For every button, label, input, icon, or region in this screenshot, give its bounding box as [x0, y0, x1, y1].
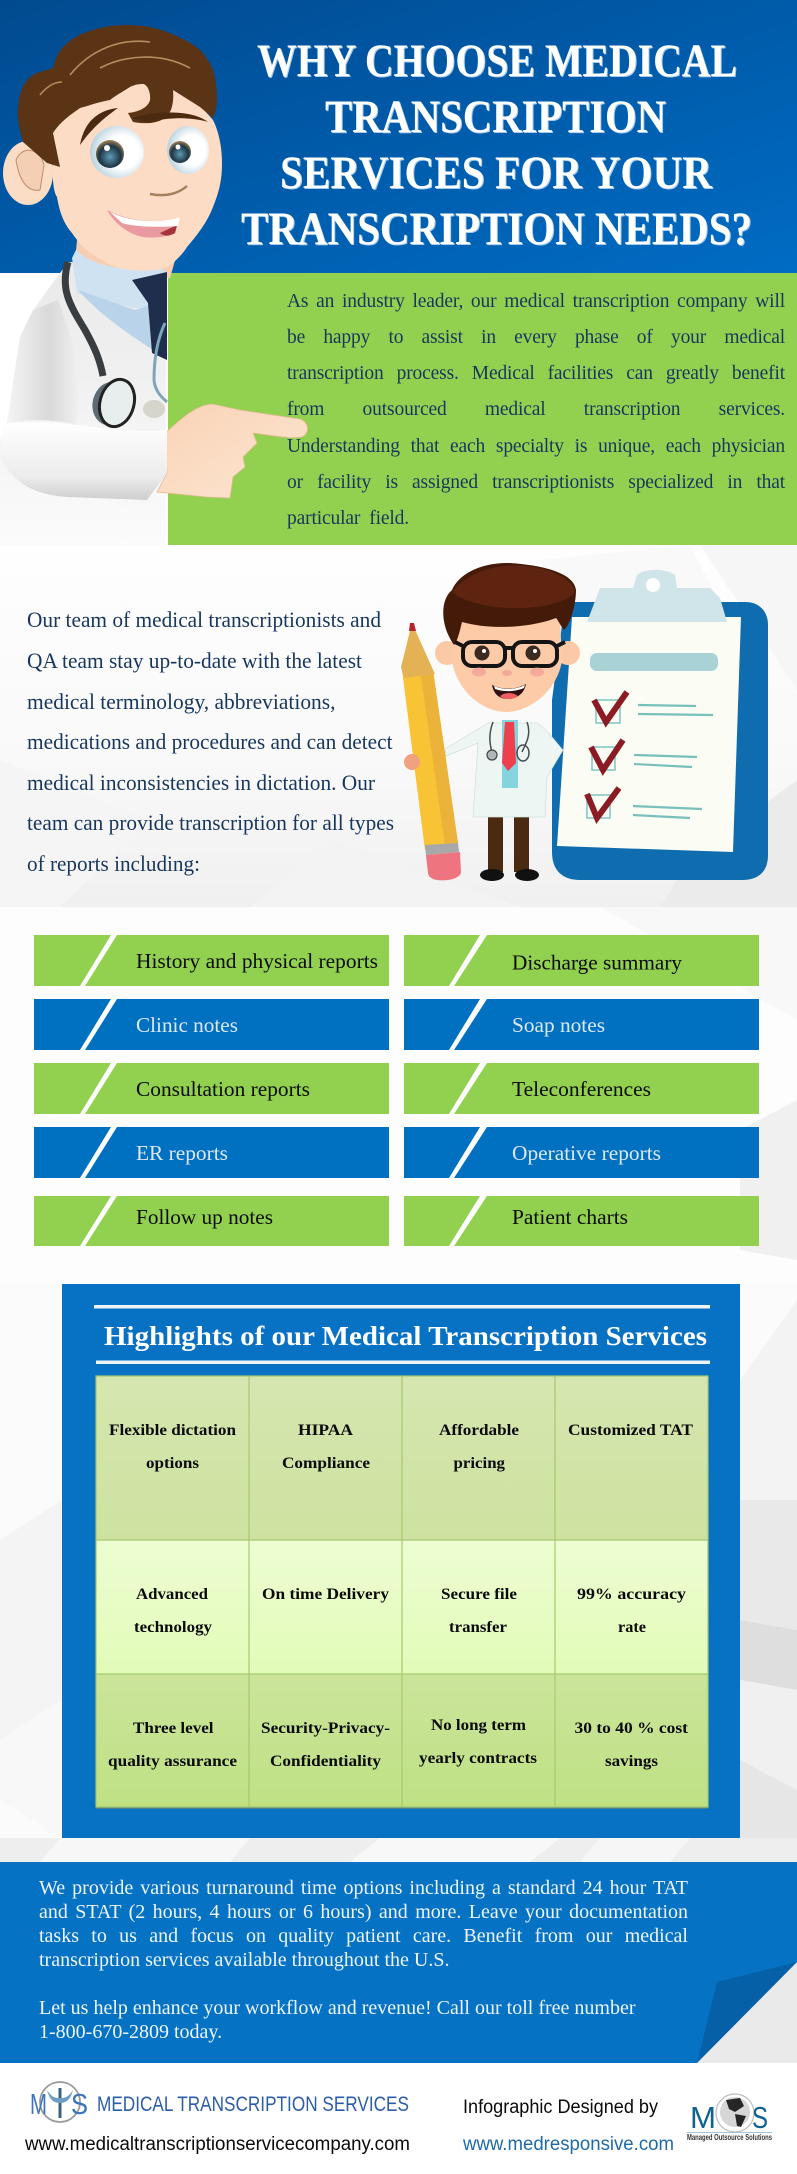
doctor smile [107, 210, 180, 238]
report: Consultation reports [34, 1063, 389, 1114]
report: Teleconferences: Teleconferences [512, 1077, 651, 1101]
report: Discharge summary [404, 935, 759, 986]
closing paragraphs [39, 1877, 688, 2043]
highlights table: HIPAA [298, 1422, 354, 1439]
clipboard paper [557, 617, 741, 852]
doctor nose [150, 186, 187, 195]
highlights table: Compliance [282, 1455, 370, 1472]
closing paragraphs: We provide various turnaround time options including a standard 24 hour TAT [39, 1877, 688, 1899]
report: ER reports [34, 1127, 389, 1178]
doctor right eye [167, 126, 209, 174]
logo: Managed Outsource Solutions [687, 2094, 772, 2142]
report: Soap notes [404, 999, 759, 1050]
report: Teleconferences [404, 1063, 759, 1114]
doctor coat body [0, 262, 166, 545]
stethoscope chest piece [88, 374, 140, 431]
highlights table: Advanced [136, 1586, 208, 1603]
highlights table: Affordable [439, 1422, 519, 1439]
highlights table: Security-Privacy- [261, 1720, 390, 1737]
highlights table: transfer [449, 1619, 507, 1636]
paragraph: team of transcriptionists: medications and procedures and can detect [27, 729, 392, 754]
highlights table [96, 1376, 708, 1809]
highlights table: Confidentiality [270, 1753, 381, 1770]
intro paragraph on green band: As an industry leader, our medical transcription company will [287, 291, 785, 312]
website url: www.medicaltranscriptionservicecompany.com [24, 2134, 410, 2155]
report: Patient charts [404, 1196, 759, 1246]
paragraph: team of transcriptionists: medical inconsistencies in dictation. Our [27, 770, 376, 795]
highlights table: technology [134, 1619, 212, 1636]
doctor left eye [90, 126, 144, 178]
doctor upper arm shading [7, 300, 79, 424]
small doctor lab coat and body [404, 720, 563, 881]
highlights table: 99% accuracy [577, 1586, 686, 1603]
doctor necktie [132, 272, 167, 360]
report: Discharge summary: Discharge summary [512, 950, 683, 974]
highlights table: quality assurance [108, 1753, 237, 1770]
highlights table: Three level [133, 1720, 214, 1737]
paragraph: team of transcriptionists [27, 607, 394, 876]
intro paragraph on green band: from outsourced medical transcription services. [287, 399, 785, 420]
stethoscope right tube [154, 323, 167, 402]
small doctor head [435, 563, 580, 712]
coat button [143, 400, 165, 418]
closing paragraphs: Let us help enhance your workflow and revenue! Call our toll free number [39, 1997, 636, 2019]
highlights table: options [146, 1455, 199, 1472]
intro paragraph on green band: transcription process. Medical facilities can greatly benefit [287, 363, 785, 384]
clipboard clip [587, 570, 727, 622]
highlights table: No long term [431, 1717, 526, 1734]
pencil [401, 623, 461, 880]
designer url: www.medresponsive.com [462, 2134, 674, 2155]
clipboard board [552, 602, 768, 880]
report: Follow up notes: Follow up notes [136, 1205, 273, 1229]
checklist item 1 [594, 692, 713, 723]
closing paragraphs: transcription services available throughout the U.S. [39, 1949, 449, 1971]
intro paragraph on green band: or facility is assigned transcriptionists specialized in that [287, 472, 785, 493]
report: Clinic notes: Clinic notes [136, 1013, 238, 1037]
highlights table: rate [618, 1619, 646, 1636]
logo: Medical Transcription Services [30, 2082, 88, 2122]
hand pointing [157, 404, 307, 498]
illustration: doctor pointing [0, 25, 308, 500]
stethoscope tube [65, 262, 103, 376]
intro paragraph on green band: Understanding that each specialty is unique, each physician [287, 436, 785, 456]
paragraph: team of transcriptionists: Our team of medical transcriptionists and [27, 607, 381, 632]
intro paragraph on green band [287, 291, 786, 529]
report types list [34, 935, 759, 1246]
highlights table: Customized TAT [568, 1422, 694, 1439]
report: Patient charts: Patient charts [512, 1205, 628, 1229]
paragraph: team of transcriptionists: team can provide transcription for all types [27, 810, 394, 835]
report: Operative reports [404, 1127, 759, 1178]
report: Soap notes: Soap notes [512, 1013, 605, 1037]
logo: Managed Outsource Solutions: M [690, 2100, 716, 2135]
report: History and physical reports: History and physical reports [136, 949, 378, 973]
report: Clinic notes [34, 999, 389, 1050]
paragraph: team of transcriptionists: QA team stay up-to-date with the latest [27, 648, 362, 673]
doctor face [52, 80, 222, 271]
highlights table: 30 to 40 % cost [574, 1720, 689, 1737]
title: TRANSCRIPTION [325, 91, 666, 143]
logo: Medical Transcription Services: M [30, 2089, 47, 2121]
title: SERVICES FOR YOUR [280, 147, 713, 199]
intro paragraph on green band: be happy to assist in every phase of your medical [287, 327, 785, 348]
clipboard header bar [590, 653, 718, 671]
highlights table: On time Delivery [262, 1586, 389, 1603]
highlights table: Secure file [441, 1586, 517, 1603]
closing paragraphs: 1-800-670-2809 today. [39, 2021, 222, 2043]
doctor eyebrows [80, 108, 208, 145]
report: ER reports: ER reports [136, 1141, 228, 1165]
doctor neck [75, 240, 178, 278]
coat sleeve [0, 422, 167, 500]
logo: Managed Outsource Solutions: S [752, 2100, 768, 2135]
brand name: MEDICAL TRANSCRIPTION SERVICES [97, 2093, 409, 2116]
doctor shirt collar [72, 250, 168, 308]
highlights heading: Highlights of our Medical Transcription Services [104, 1321, 707, 1351]
highlights table: Flexible dictation [109, 1422, 236, 1439]
report: Consultation reports: Consultation reports [136, 1077, 310, 1101]
closing paragraphs: and STAT (2 hours, 4 hours or 6 hours) and more. Leave your documentation [39, 1901, 688, 1923]
checklist item 3 [587, 788, 702, 818]
highlights table: pricing [454, 1455, 505, 1472]
title [241, 35, 752, 255]
highlights table: yearly contracts [419, 1750, 537, 1767]
report: Follow up notes [34, 1196, 389, 1246]
intro paragraph on green band: particular field. [287, 508, 409, 529]
checklist item 2 [591, 740, 697, 770]
logo: Medical Transcription Services: S [71, 2089, 88, 2121]
closing paragraphs: tasks to us and focus on quality patient care. Benefit from our medical [39, 1925, 688, 1947]
report: Operative reports: Operative reports [512, 1141, 661, 1165]
report: History and physical reports [34, 935, 389, 986]
doctor shirt front [78, 290, 153, 350]
designer credit: Infographic Designed by [463, 2097, 658, 2118]
highlights table: savings [605, 1753, 658, 1770]
doctor hair [18, 25, 217, 167]
doctor ear [3, 141, 53, 205]
illustration: doctor with pencil and clipboard [401, 563, 768, 881]
paragraph: team of transcriptionists: medical terminology, abbreviations, [27, 689, 336, 714]
paragraph: team of transcriptionists: of reports including: [27, 851, 200, 876]
